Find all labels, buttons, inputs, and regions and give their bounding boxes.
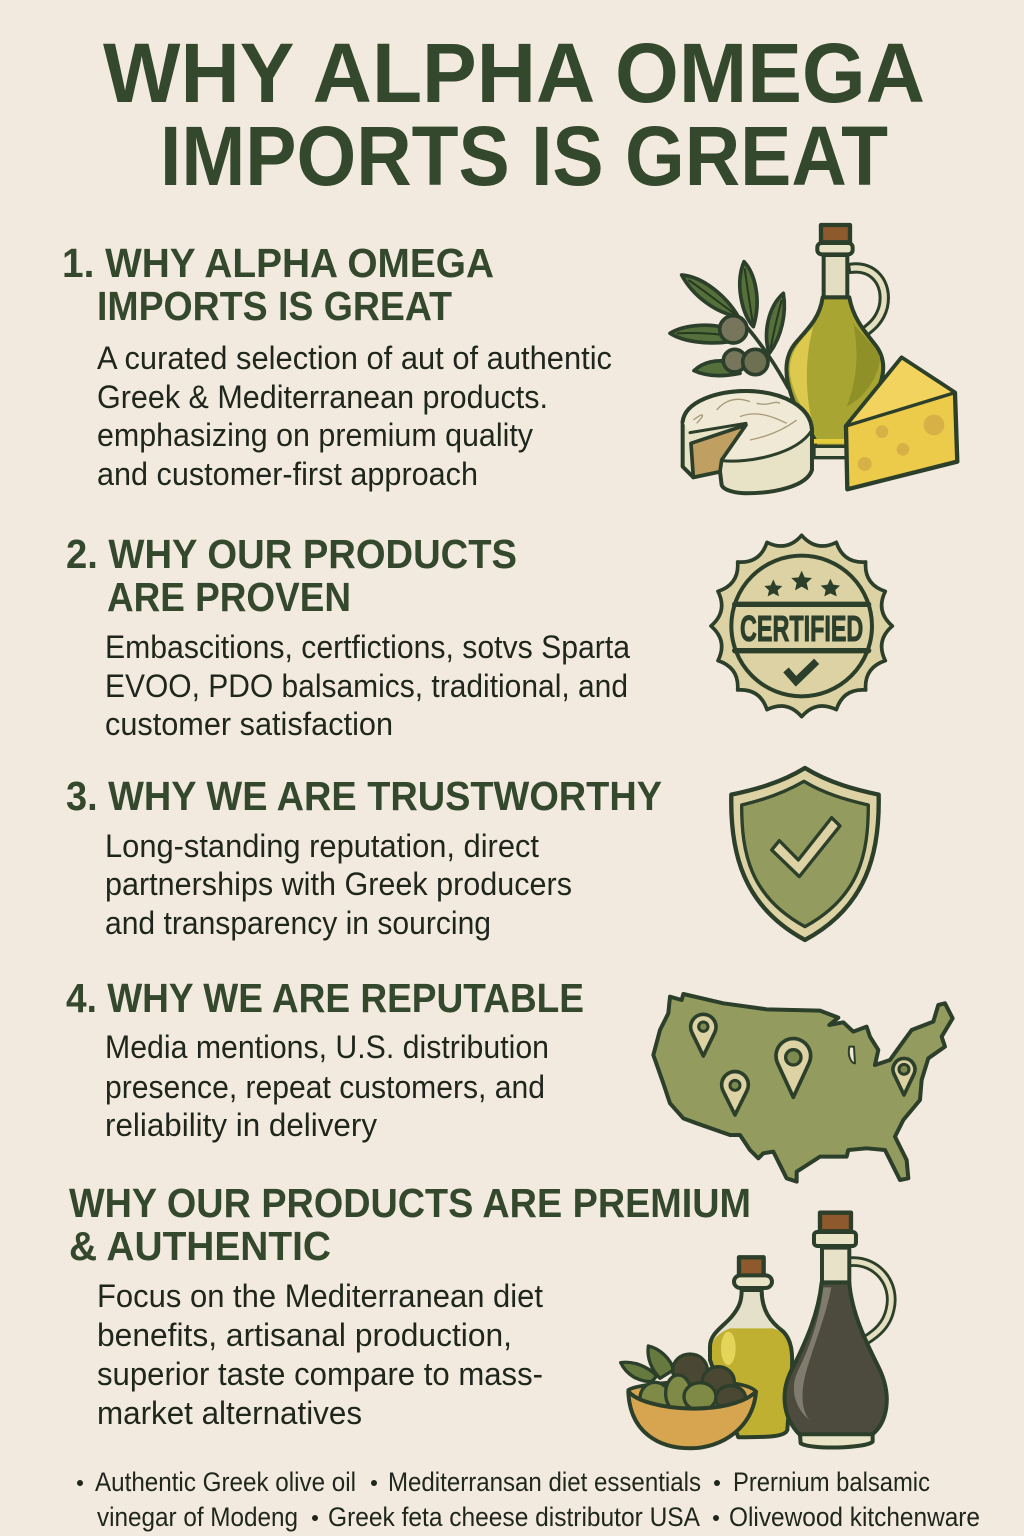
text block: section 1: and customer-first approach xyxy=(97,456,478,492)
title: IMPORTS IS GREAT xyxy=(160,109,888,203)
text block: section 3: partnerships with Greek producers xyxy=(105,866,572,902)
keyword list: Mediterransan diet essentials xyxy=(388,1467,701,1497)
keyword list: Olivewood kitchenware xyxy=(729,1502,980,1532)
text block: section 4: presence, repeat customers, and xyxy=(105,1069,545,1105)
text block: section 1: Greek & Mediterranean products. xyxy=(97,379,548,415)
heading: section 1: IMPORTS IS GREAT xyxy=(97,283,452,329)
bullet xyxy=(714,1480,720,1486)
round soft cheese xyxy=(683,391,812,493)
panel: section 2 xyxy=(66,531,892,742)
text block: section 4: Media mentions, U.S. distribution xyxy=(105,1029,549,1065)
location pin xyxy=(893,1058,915,1095)
text block: section 1: emphasizing on premium quality xyxy=(97,417,533,453)
heading: section 2 xyxy=(66,531,517,620)
title xyxy=(103,26,925,203)
bullet xyxy=(713,1515,719,1521)
heading: section 4: 4. WHY WE ARE REPUTABLE xyxy=(66,975,584,1021)
bullet xyxy=(371,1480,377,1486)
panel: section 5 xyxy=(69,1180,891,1448)
text block: section 5: benefits, artisanal production, xyxy=(97,1317,512,1353)
text block: section 5: Focus on the Mediterranean diet xyxy=(97,1278,543,1314)
balsamic vinegar bottle xyxy=(785,1213,891,1448)
text block: section 4 xyxy=(105,1029,549,1143)
text block: section 5 xyxy=(97,1278,543,1431)
heading: section 5: & AUTHENTIC xyxy=(69,1223,331,1269)
icon: certified badge xyxy=(711,535,892,717)
bullet xyxy=(312,1515,318,1521)
olive oil bottle xyxy=(710,1257,792,1437)
heading: section 5: WHY OUR PRODUCTS ARE PREMIUM xyxy=(69,1180,751,1226)
panel: section 3 xyxy=(66,768,879,941)
keyword list: Authentic Greek olive oil xyxy=(95,1467,356,1497)
text block: section 5: market alternatives xyxy=(97,1395,362,1431)
olive branch xyxy=(670,262,788,388)
location pin xyxy=(776,1039,811,1097)
location pin xyxy=(722,1072,748,1115)
text block: section 2: EVOO, PDO balsamics, traditional, and xyxy=(105,668,628,704)
keyword list: Greek feta cheese distributor USA xyxy=(328,1502,700,1532)
heading: section 5 xyxy=(69,1180,751,1269)
icon: US map with location pins xyxy=(653,994,953,1182)
text block: section 2: customer satisfaction xyxy=(105,706,393,742)
keyword list xyxy=(77,1467,980,1532)
icon: oil bottles and olive bowl xyxy=(621,1213,891,1448)
oil bottle xyxy=(786,225,884,458)
icon: certified badge: CERTIFIED xyxy=(740,608,863,649)
text block: section 4: reliability in delivery xyxy=(105,1107,377,1143)
location pin xyxy=(691,1014,716,1056)
text block: section 1: A curated selection of aut of authentic xyxy=(97,340,612,376)
text block: section 3 xyxy=(105,828,572,941)
heading: section 2: 2. WHY OUR PRODUCTS xyxy=(66,531,517,577)
text block: section 3: Long-standing reputation, direct xyxy=(105,828,539,864)
text block: section 1 xyxy=(97,340,612,492)
icon: olive oil, olive branch and cheeses xyxy=(670,225,957,493)
text block: section 3: and transparency in sourcing xyxy=(105,905,491,941)
text block: section 2: Embascitions, certfictions, sotvs Sparta xyxy=(105,629,630,665)
heading: section 1 xyxy=(62,240,494,329)
keyword list: Prernium balsamic xyxy=(733,1467,930,1497)
icon: shield with check xyxy=(731,768,879,940)
olive bowl xyxy=(621,1346,756,1448)
panel: section 4 xyxy=(66,975,953,1182)
keyword list: vinegar of Modeng xyxy=(97,1502,298,1532)
text block: section 2 xyxy=(105,629,630,742)
heading: section 2: ARE PROVEN xyxy=(107,574,351,620)
panel: section 1 xyxy=(62,225,957,493)
heading: section 3: 3. WHY WE ARE TRUSTWORTHY xyxy=(66,773,662,819)
cheese wedge xyxy=(846,358,957,489)
heading: section 1: 1. WHY ALPHA OMEGA xyxy=(62,240,494,286)
bullet xyxy=(77,1480,83,1486)
title: WHY ALPHA OMEGA xyxy=(103,26,925,120)
text block: section 5: superior taste compare to mass- xyxy=(97,1356,543,1392)
